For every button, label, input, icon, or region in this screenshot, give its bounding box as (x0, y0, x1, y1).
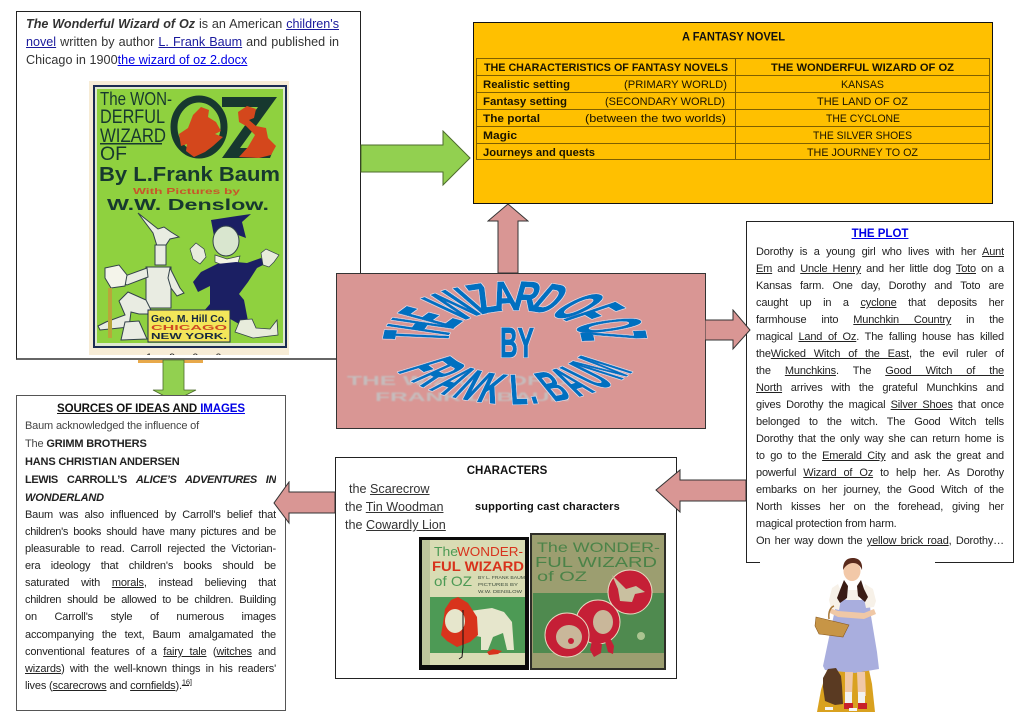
image: green characters book cover: FUL WIZARD (535, 555, 657, 571)
plot text: gives Dorothy the magical Silver Shoes that once (756, 399, 1004, 411)
publisher label (148, 310, 230, 342)
image: lion book cover: FUL WIZARD (432, 559, 524, 574)
fantasy novel heading: A FANTASY NOVEL (682, 32, 785, 44)
plot text: North arrives with the grateful Munchkins and (756, 382, 1004, 394)
dog toto (823, 668, 843, 705)
panel: characters (335, 457, 677, 679)
image: dorothy cutout (760, 558, 935, 712)
red medallion: scarecrow (545, 613, 589, 657)
table: fantasy characteristics comparison: Journeys and quests (483, 147, 595, 159)
image: lion book cover: The (434, 544, 458, 559)
sources text: HANS CHRISTIAN ANDERSEN (25, 456, 180, 468)
sources text: conventional features of a fairy tale (witches and (25, 646, 276, 658)
plot text: belonged to the witch. The Good Witch tells (756, 416, 1004, 428)
character list (345, 482, 446, 532)
arrow: pink up to fantasy novel (487, 204, 529, 273)
characters heading: CHARACTERS (467, 465, 547, 477)
panel: the plot (746, 221, 1014, 563)
publisher label: Geo. M. Hill Co. (151, 314, 227, 325)
plot text: Em and Uncle Henry and her little dog Toto on a (756, 263, 1004, 275)
blouse and arms (829, 584, 876, 610)
basket (815, 617, 849, 637)
image: green characters book cover: of OZ (537, 568, 588, 584)
table: fantasy characteristics comparison: THE JOURNEY TO OZ (807, 147, 918, 159)
table: fantasy characteristics comparison: THE WONDERFUL WIZARD OF OZ (771, 62, 954, 74)
table: fantasy characteristics comparison: THE CYCLONE (826, 113, 900, 125)
word art shadow: FRANK L. BAUM (375, 390, 570, 404)
OZ lettering (174, 97, 277, 158)
table: fantasy characteristics comparison: THE SILVER SHOES (813, 130, 912, 142)
sources text: LEWIS CARROLL’S ALICE’S ADVENTURES IN (25, 474, 276, 486)
sources text: saturated with morals, instead believing that (25, 577, 276, 589)
table: fantasy characteristics comparison: Fantasy setting (483, 96, 567, 108)
table: fantasy characteristics comparison: Realistic setting (483, 79, 570, 91)
image: lion book cover: WONDER- (457, 544, 523, 559)
lion figure (467, 608, 514, 650)
table: fantasy characteristics comparison (476, 58, 990, 160)
plot text: Dorothy is a young girl who lives with her Aunt (756, 246, 1004, 258)
plot text: to go to the Emerald City and ask the great and (756, 450, 1004, 462)
introduction text: Chicago in 1900the wizard of oz 2.docx (26, 53, 247, 67)
image: green characters book cover (530, 533, 666, 670)
character list: the Scarecrow (349, 482, 430, 496)
arrow: pink left to characters (655, 469, 746, 513)
image: green book cover: The WON- (100, 89, 172, 109)
red medallion: dorothy (576, 600, 620, 657)
sources text: wizards) with the well-known things in his readers' (25, 663, 276, 675)
plot text: North kisses her on the forehead, giving her (756, 501, 1004, 513)
sources heading: SOURCES OF IDEAS AND IMAGES (57, 403, 245, 415)
sources text: Baum was also influenced by Carroll's belief that (25, 509, 276, 521)
plot text: Kansas farm. One day, Dorothy and Toto are (756, 280, 1004, 292)
table: fantasy characteristics comparison: (PRIMARY WORLD) (624, 79, 727, 91)
supporting cast label: supporting cast characters (475, 501, 620, 513)
word art: by: BY (500, 319, 534, 366)
image: green book cover: WIZARD (100, 126, 166, 147)
word art: frank l. baum: FRANK L. BAUM (397, 354, 634, 406)
image: green book cover: By L.Frank Baum (99, 164, 280, 186)
sources text: era ideology that children's books should be (25, 560, 276, 572)
plot text: theWicked Witch of the East, the evil ruler of (756, 348, 1004, 360)
sources text: The GRIMM BROTHERS (25, 438, 147, 450)
table: fantasy characteristics comparison: THE CHARACTERISTICS OF FANTASY NOVELS (484, 62, 728, 74)
arrow: green down to sources (152, 360, 196, 395)
sources text: pleasurable to read. Carroll rejected the Victorian- (25, 543, 276, 555)
character list: the Tin Woodman (345, 500, 443, 514)
table: fantasy characteristics comparison: (SECONDARY WORLD) (605, 96, 725, 108)
plot text: farmhouse into Munchkin Country in the (756, 314, 1004, 326)
image: lion book cover: W.W. DENSLOW (478, 589, 523, 594)
tin woodman (98, 213, 184, 340)
panel: sources of ideas and images (16, 395, 286, 711)
red medallion: tin woodman (608, 570, 652, 614)
plot text: embarks on her journey, the Good Witch of the (756, 484, 1004, 496)
image: lion book cover (419, 537, 529, 670)
plot text: Dorothy that the only way she can return home is (756, 433, 1004, 445)
plot text: magical protection from harm. (756, 518, 897, 530)
sources text: on Carroll's style of numerous images (25, 611, 276, 623)
publisher label: CHICAGO (151, 323, 227, 332)
sources text: Baum acknowledged the influence of (25, 420, 199, 432)
table: fantasy characteristics comparison: KANSAS (841, 79, 884, 91)
plot text: the Munchkins. The Good Witch of the (756, 365, 1004, 377)
image: green book cover (89, 81, 289, 355)
word art shadow: THE WIZARD OF OZ (347, 373, 583, 388)
image: green book cover: With Pictures by (133, 186, 240, 196)
orange sliver of book cover (138, 360, 203, 362)
dress (823, 596, 879, 673)
image: green book cover: DERFUL (100, 107, 165, 128)
table: fantasy characteristics comparison: THE LAND OF OZ (817, 96, 908, 108)
table: fantasy characteristics comparison: (between the two worlds) (585, 113, 726, 125)
plot text: caught up in a cyclone that deposits her (756, 297, 1004, 309)
word art shadow (347, 373, 583, 404)
sources text: accompanying the text, Baum amalgamated the (25, 629, 276, 641)
head and hair (844, 561, 860, 581)
sources text: children's books should have many pictures and be (25, 526, 276, 538)
introduction text: novel written by author L. Frank Baum and published in (26, 35, 339, 49)
plot heading: THE PLOT (852, 228, 908, 240)
sources text: WONDERLAND (25, 492, 104, 504)
introduction text: The Wonderful Wizard of Oz is an American children's (26, 17, 339, 31)
arrow: green right to fantasy novel (360, 130, 471, 186)
arrow: pink right to the plot (706, 309, 751, 350)
table: fantasy characteristics comparison: Magic (483, 130, 517, 142)
table: fantasy characteristics comparison: The portal (483, 113, 540, 125)
panel: central title word art (336, 273, 706, 429)
image: green characters book cover: The WONDER- (537, 539, 660, 555)
introduction text (26, 17, 339, 67)
plot text: powerful Wizard of Oz to help her. As Dorothy (756, 467, 1004, 479)
arrow: pink left to sources (274, 481, 336, 524)
character list: the Cowardly Lion (345, 518, 446, 532)
sources text: children should be allowed to be children. Building (25, 594, 276, 606)
image: lion book cover: BY L. FRANK BAUM (478, 575, 525, 580)
image: green book cover: OF (100, 144, 127, 165)
plot text: On her way down the yellow brick road, Dorothy… (756, 535, 1004, 547)
image: lion book cover: of OZ (434, 573, 472, 589)
scarecrow (190, 214, 279, 338)
plot text: magical Land of Oz. The falling house has killed (756, 331, 1004, 343)
publisher label: NEW YORK. (151, 331, 227, 341)
image: green book cover: W.W. Denslow. (107, 197, 269, 214)
sources text (25, 420, 276, 692)
image: lion book cover: PICTURES BY (478, 582, 518, 587)
panel: book introduction (16, 11, 361, 360)
panel: a fantasy novel (473, 22, 993, 204)
plot text (756, 246, 1004, 547)
